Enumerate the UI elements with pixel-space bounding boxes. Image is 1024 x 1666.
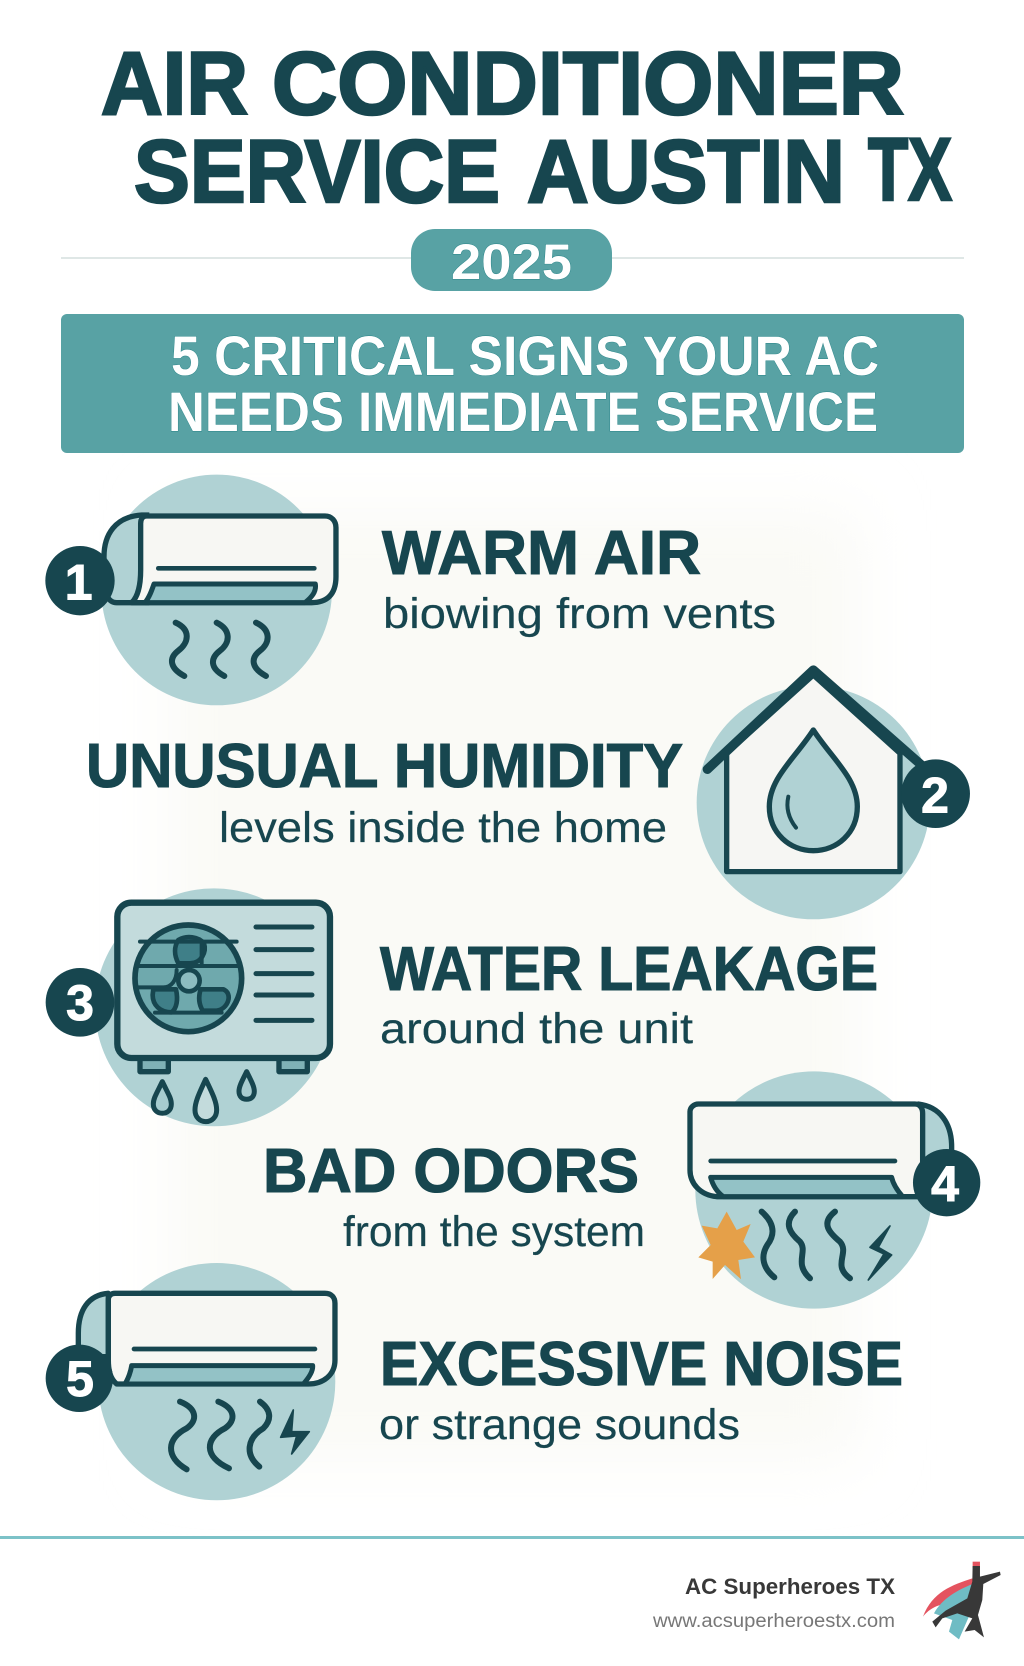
footer brand: [652, 1574, 895, 1632]
title: TX: [868, 119, 952, 219]
sign 5 text: [379, 1330, 903, 1449]
sign 1 text: [382, 519, 776, 638]
heading banner: 5 CRITICAL SIGNS YOUR AC: [171, 324, 879, 387]
sign 3 text: WATER LEAKAGE: [380, 935, 878, 1004]
year badge: 2025: [451, 234, 572, 290]
sign 4 text: from the system: [343, 1208, 645, 1256]
sign 1 text: biowing from vents: [383, 590, 776, 638]
sign 1 icon: warm air from wall unit: 1: [65, 554, 93, 610]
sign 2 text: UNUSUAL HUMIDITY: [86, 732, 683, 801]
sign 2 text: levels inside the home: [219, 804, 667, 852]
logo: flying superhero: [923, 1562, 1001, 1639]
sign 4 text: [263, 1137, 645, 1256]
year badge: [411, 229, 612, 291]
heading banner: NEEDS IMMEDIATE SERVICE: [168, 380, 878, 443]
footer brand: www.acsuperheroestx.com: [652, 1611, 895, 1632]
title: AIR: [101, 33, 248, 133]
sign 5 icon: wall unit with noise: 5: [66, 1351, 94, 1407]
title: SERVICE: [134, 121, 500, 221]
title: [101, 33, 952, 221]
sign 5 text: EXCESSIVE NOISE: [380, 1330, 903, 1399]
sign 3 icon: outdoor unit dripping: [46, 888, 333, 1126]
sign 4 icon: wall unit with odor: [690, 1071, 980, 1309]
heading banner: [61, 314, 964, 453]
sign 3 icon: outdoor unit dripping: 3: [66, 975, 94, 1031]
sign 3 text: [380, 935, 878, 1053]
sign 2 icon: house with water drop: 2: [921, 768, 949, 824]
sign 1 icon: warm air from wall unit: [45, 475, 336, 705]
footer brand: AC Superheroes TX: [685, 1574, 895, 1599]
sign 2 icon: house with water drop: [697, 670, 970, 919]
sign 4 icon: wall unit with odor: 4: [931, 1156, 959, 1212]
sign 1 text: WARM AIR: [382, 519, 701, 588]
title: CONDITIONER: [272, 33, 904, 133]
sign 2 text: [86, 732, 683, 852]
title: AUSTIN: [527, 121, 845, 221]
sign 5 text: or strange sounds: [379, 1401, 740, 1449]
sign 4 text: BAD ODORS: [263, 1137, 639, 1206]
sign 5 icon: wall unit with noise: [46, 1263, 335, 1500]
sign 3 text: around the unit: [380, 1005, 693, 1053]
